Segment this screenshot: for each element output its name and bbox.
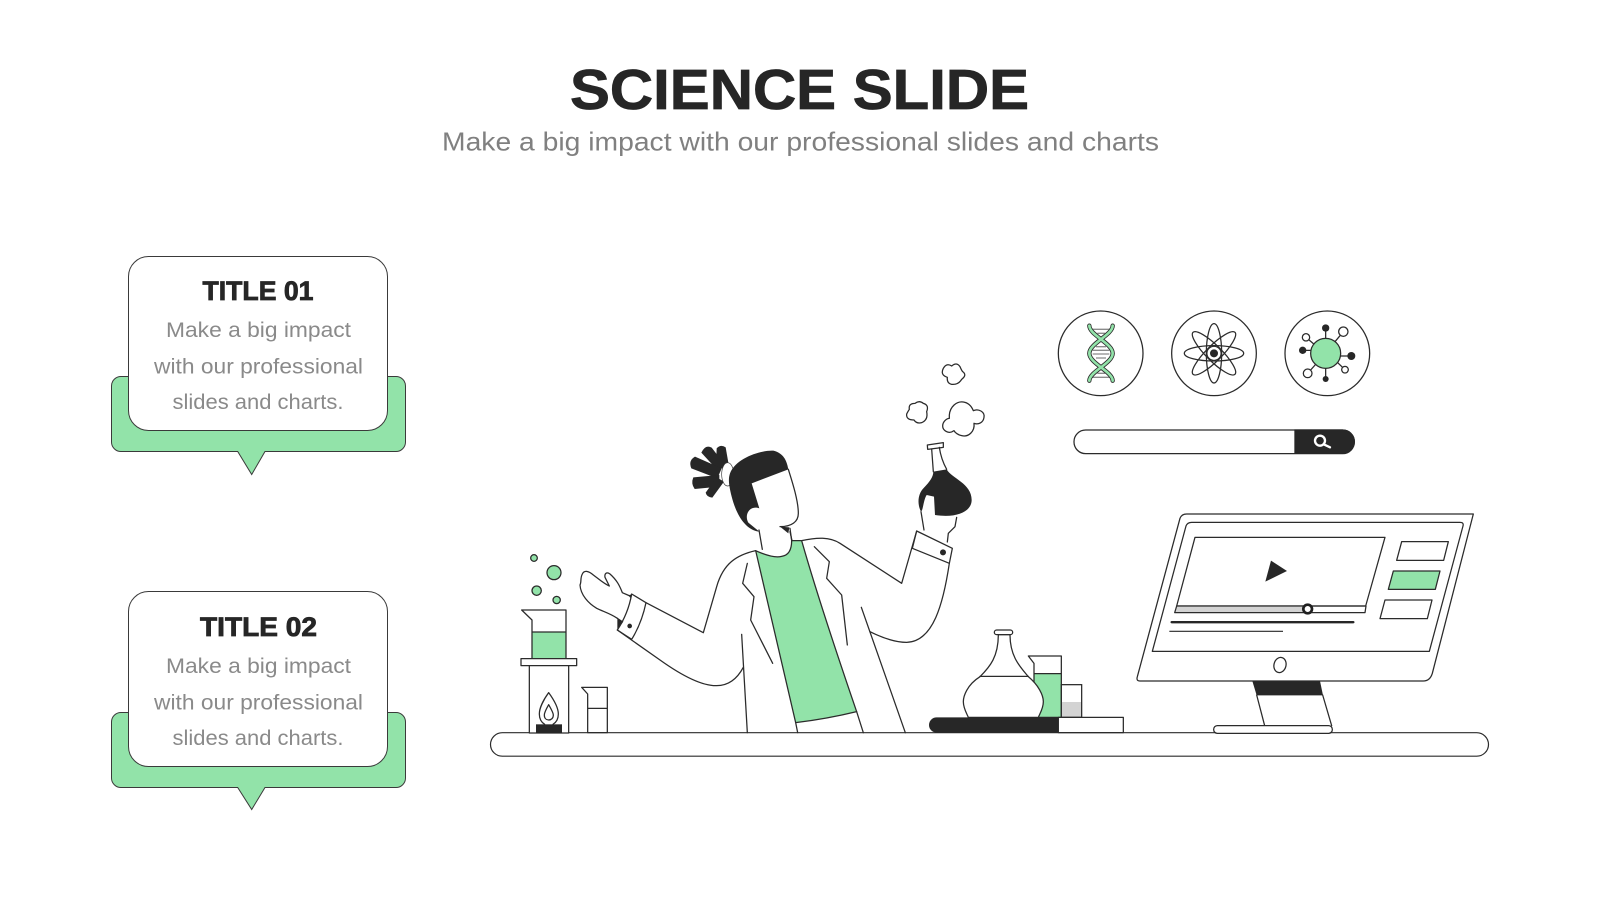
- icon: atom: [1172, 311, 1256, 396]
- face outline: [780, 469, 798, 541]
- burner stand: [521, 659, 577, 733]
- round flask: [963, 630, 1043, 717]
- scientist: [580, 528, 952, 733]
- right hand: [921, 512, 957, 542]
- search bar: [1074, 429, 1355, 454]
- monitor: [1137, 514, 1473, 733]
- lab bench: [490, 733, 1488, 756]
- title: SCIENCE SLIDE: [570, 58, 1029, 122]
- card body text: slides and charts.: [172, 391, 344, 414]
- card heading: TITLE 02: [200, 612, 317, 642]
- flask held up: [919, 443, 972, 516]
- green shirt: [756, 541, 857, 723]
- small box with gray fill: [1061, 685, 1082, 717]
- card body text: with our professional: [153, 356, 363, 378]
- caption lines: [1169, 622, 1353, 631]
- card body text: with our professional: [153, 692, 363, 714]
- bubbles: [531, 555, 561, 604]
- burner and beakers: [521, 555, 607, 733]
- hair bun: [690, 446, 734, 498]
- white slab: [1058, 717, 1123, 733]
- panel: title 02 callout: [112, 592, 406, 810]
- card body text: Make a big impact: [166, 655, 351, 678]
- video player: [1175, 537, 1385, 613]
- white card: [128, 256, 388, 430]
- subtitle: Make a big impact with our professional slides and charts: [442, 126, 1159, 156]
- icon: virus: [1285, 311, 1370, 396]
- monitor stand: [1214, 681, 1332, 733]
- right cuff: [912, 531, 952, 563]
- beaker on burner: [522, 610, 566, 659]
- white card: [128, 592, 388, 766]
- card body text: [153, 319, 363, 414]
- black hot plate: [929, 717, 1058, 733]
- small beaker: [582, 687, 607, 733]
- card body text: slides and charts.: [172, 727, 344, 750]
- card heading: TITLE 01: [202, 276, 314, 306]
- beaker behind flask: [1028, 656, 1061, 717]
- green speech bubble backing: [112, 712, 406, 810]
- screen: [1152, 522, 1463, 651]
- monitor body: [1137, 514, 1473, 681]
- card body text: [153, 655, 363, 750]
- neck: [759, 528, 792, 549]
- card body text: Make a big impact: [166, 319, 351, 342]
- left cuff and hand: [580, 571, 646, 639]
- green speech bubble backing: [112, 376, 406, 474]
- panel: title 01 callout: [112, 256, 406, 474]
- lab coat: [617, 531, 949, 733]
- side thumbnails: [1380, 542, 1448, 619]
- table glassware: [929, 630, 1123, 733]
- science icons: [1058, 311, 1370, 454]
- smoke clouds: [907, 364, 984, 436]
- power button: [1272, 656, 1288, 674]
- icon: dna: [1058, 311, 1143, 396]
- hair: [729, 451, 788, 532]
